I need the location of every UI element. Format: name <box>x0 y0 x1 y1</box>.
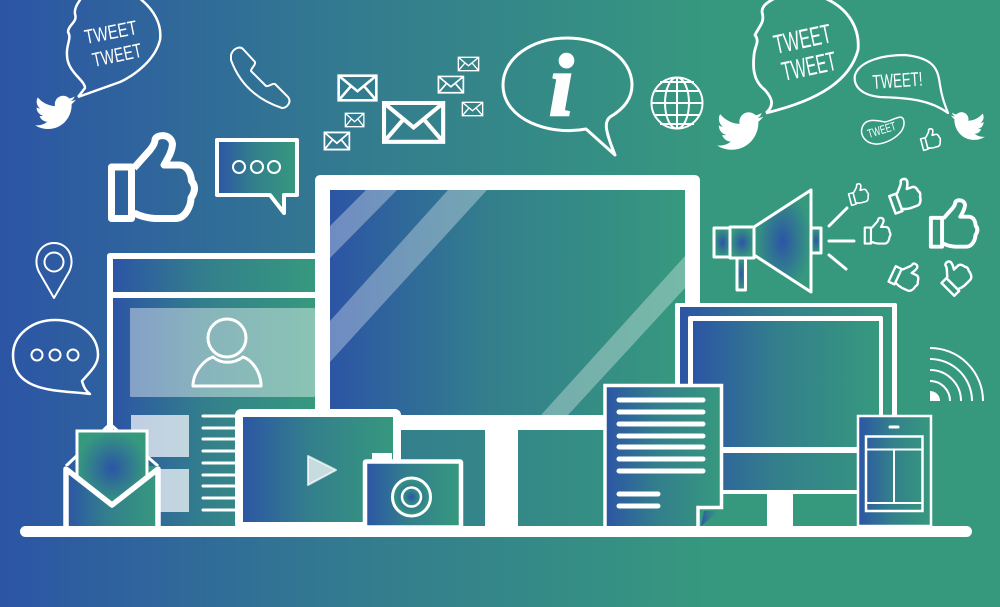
camera <box>365 453 461 528</box>
icon: megaphone <box>714 190 854 292</box>
wifi signal <box>930 348 983 401</box>
small tweet bubble with mirrored bird <box>855 55 985 140</box>
left tweet bubble with bird <box>35 0 160 129</box>
document <box>605 386 722 526</box>
content placeholders <box>131 415 236 512</box>
profile panel with avatar <box>130 308 315 397</box>
video player with play icon <box>239 413 397 526</box>
smartphone <box>858 416 931 526</box>
icons: flying envelopes <box>324 57 483 150</box>
info speech bubble: i <box>549 38 574 135</box>
right tweet bubble with bird: TWEET <box>779 46 839 87</box>
icon: globe <box>652 78 702 128</box>
open envelope with letter <box>66 424 158 526</box>
icon: location pin <box>36 243 72 298</box>
small tweet bubble with mirrored bird: TWEET! <box>872 69 923 94</box>
chat box with dots <box>217 140 297 213</box>
shelf <box>20 526 972 537</box>
icon: small thumbs up cluster <box>847 127 977 296</box>
browser window with profile <box>110 256 315 526</box>
right tweet bubble with bird <box>717 0 858 150</box>
info speech bubble <box>503 38 632 155</box>
large monitor <box>315 175 700 526</box>
left tweet bubble with bird: TWEET <box>83 17 139 49</box>
left tweet bubble with bird: TWEET <box>90 40 144 72</box>
right tweet bubble with bird: TWEET <box>771 18 834 60</box>
icon: large thumbs up <box>112 136 194 218</box>
icon: telephone handset <box>231 48 289 108</box>
small monitor <box>675 303 897 526</box>
small bean tweet bubble <box>862 117 904 144</box>
left speech bubble with dots <box>13 320 98 394</box>
small bean tweet bubble: TWEET <box>866 119 898 141</box>
